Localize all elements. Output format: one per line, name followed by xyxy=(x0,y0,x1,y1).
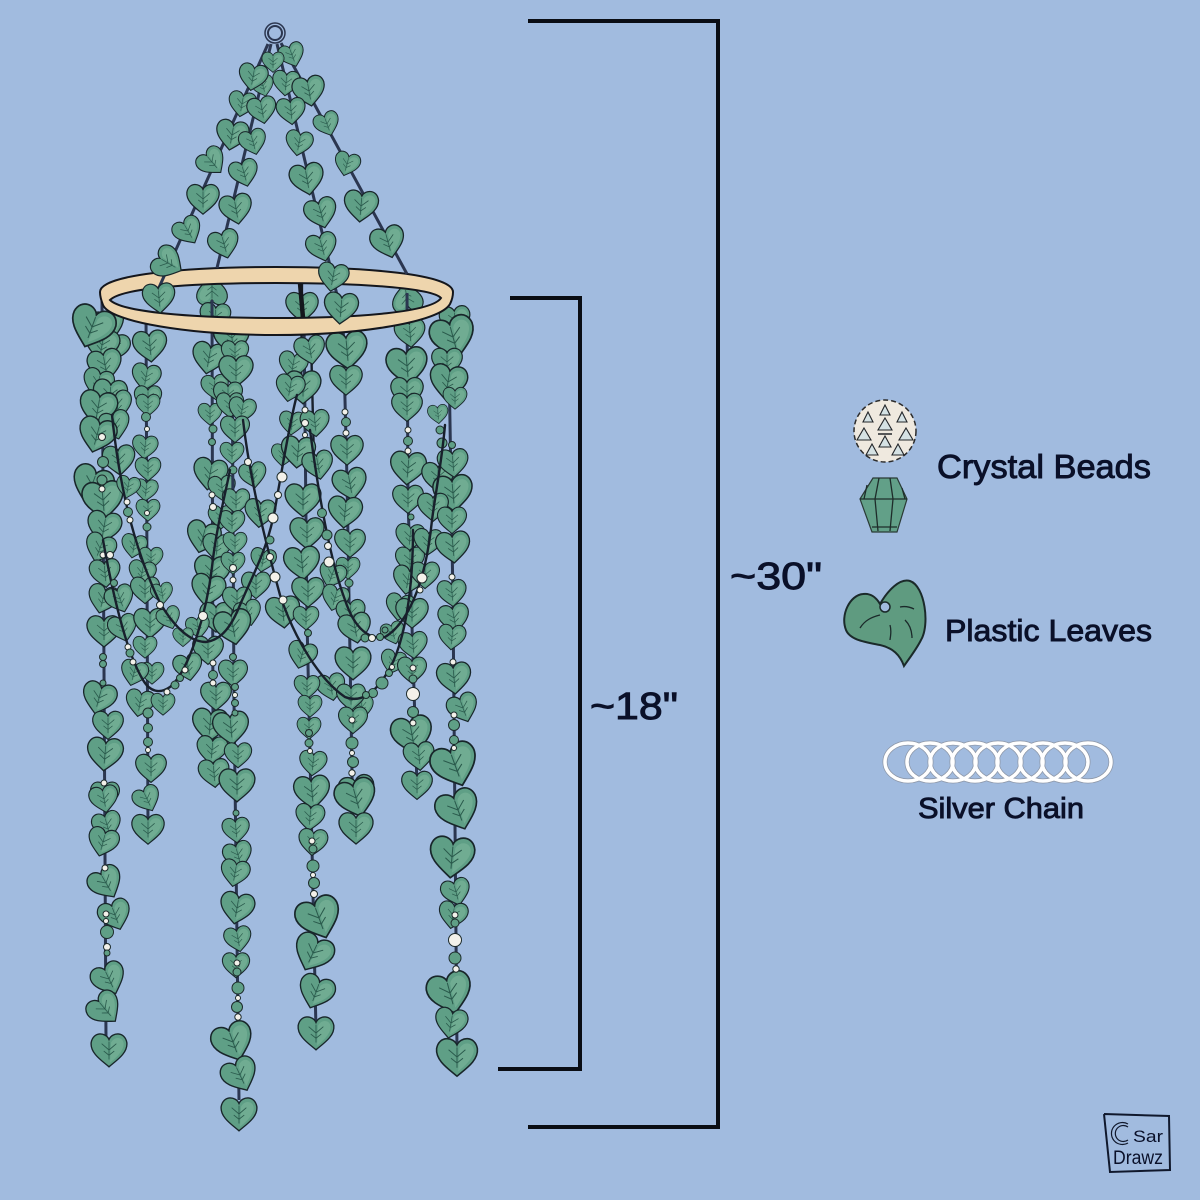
strand D with leaves and beads xyxy=(207,320,278,1131)
embroidery hoop xyxy=(100,267,453,335)
label: 30 inches: ~30" xyxy=(730,556,822,598)
strand H with leaves and beads xyxy=(378,293,436,799)
label: silver chain: Silver Chain xyxy=(918,793,1084,825)
back leaves behind hoop xyxy=(197,277,425,333)
chandelier: leaf mobile xyxy=(64,23,485,1131)
strand A with leaves and beads xyxy=(64,300,141,1067)
icon: plastic leaf xyxy=(844,581,925,666)
signature: Sar Drawz: Sar xyxy=(1133,1127,1163,1146)
draped swag chains with beads xyxy=(103,395,445,699)
icon: silver chain xyxy=(885,743,1111,781)
strand B with leaves and beads xyxy=(114,313,184,844)
strand G with leaves and beads xyxy=(315,320,381,844)
strand E and F with leaves and beads xyxy=(265,282,348,1050)
signature: Sar Drawz xyxy=(1104,1114,1170,1172)
bracket: 30 inch total height xyxy=(528,21,718,1127)
label: 18 inches: ~18" xyxy=(590,686,678,728)
icon: crystal bead xyxy=(854,400,916,462)
strand I with leaves and beads xyxy=(410,305,485,1076)
strand C with leaves and beads xyxy=(171,300,237,789)
bracket: 18 inch length xyxy=(498,298,580,1069)
label: crystal beads: Crystal Beads xyxy=(937,448,1151,485)
signature: Sar Drawz: Drawz xyxy=(1113,1148,1163,1169)
top hanging chains and ring xyxy=(157,23,407,320)
icon: green crystal bead xyxy=(860,478,907,532)
hanging ring xyxy=(265,23,285,43)
label: plastic leaves: Plastic Leaves xyxy=(945,613,1152,648)
leaves on the top chains xyxy=(142,40,409,325)
